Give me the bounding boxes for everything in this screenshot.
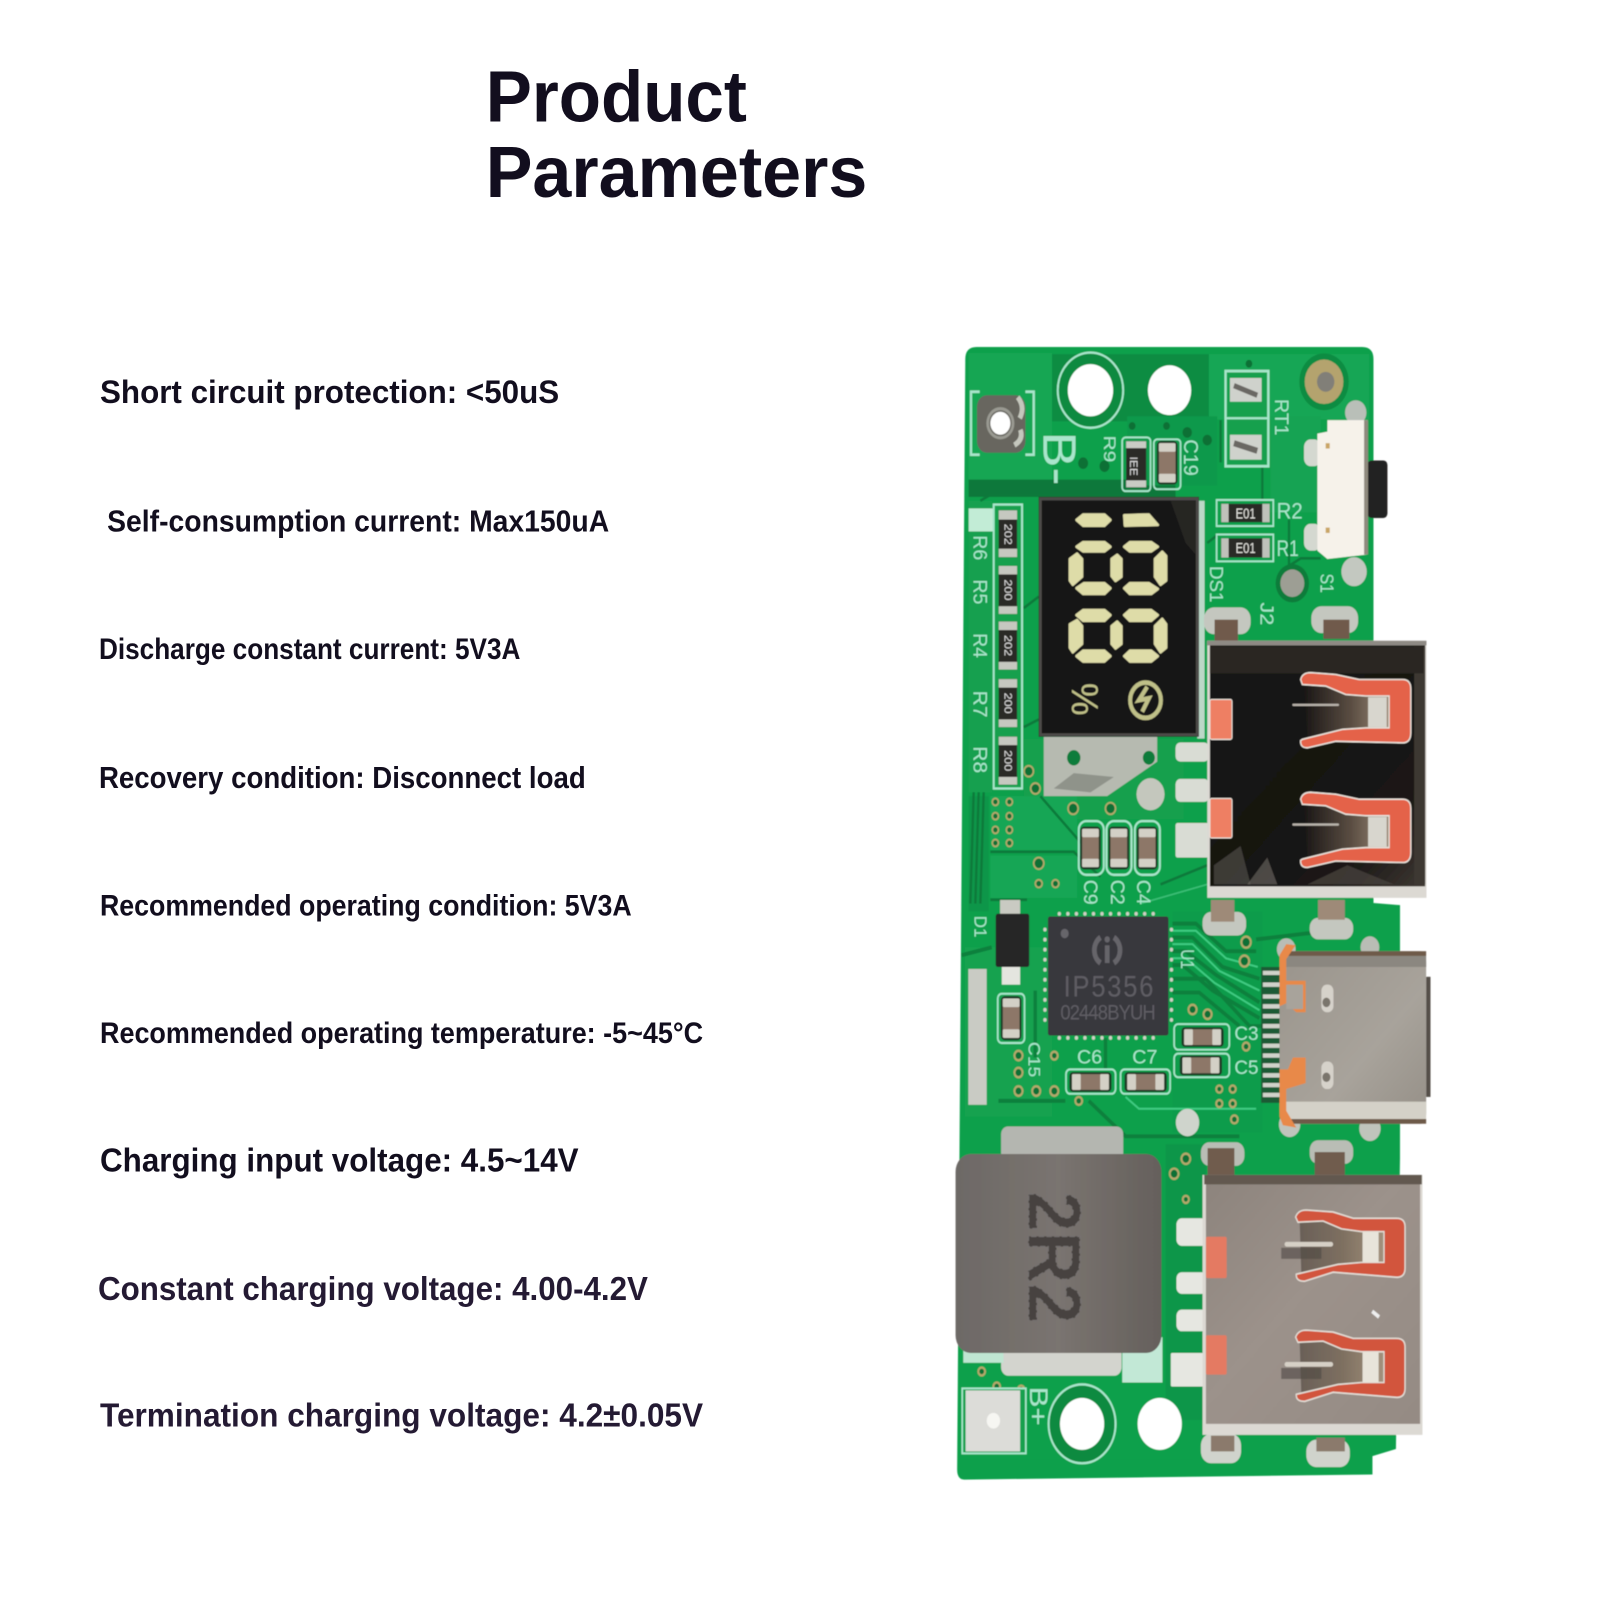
silk labels S1 DS1 J2 bbox=[1205, 566, 1336, 625]
capacitors C9 C2 C4 bbox=[1079, 821, 1160, 905]
slide switch bbox=[1304, 400, 1387, 586]
resistors R2 and R1: R2 bbox=[1277, 499, 1303, 524]
resistor R9 and capacitor C19: IEE bbox=[1127, 457, 1140, 476]
USB-A port 2 legs and pads bbox=[1171, 1140, 1353, 1467]
resistor column: R5 bbox=[969, 579, 990, 604]
mounting hole with ring, lower bbox=[1049, 1384, 1116, 1463]
title: Product bbox=[486, 56, 747, 137]
IC IP5356 chip: IP5356 bbox=[1064, 970, 1153, 1003]
USB-C connector bbox=[1261, 936, 1430, 1141]
resistor R9 and capacitor C19 bbox=[1100, 436, 1202, 491]
resistor column: R7 bbox=[969, 691, 990, 718]
label: B-: B- bbox=[1034, 432, 1086, 485]
parameter: recovery condition: Recovery condition: Disconnect load bbox=[99, 761, 586, 795]
silver strip bbox=[968, 969, 987, 1105]
LED display bbox=[1039, 497, 1205, 796]
silk labels S1 DS1 J2: DS1 bbox=[1205, 566, 1226, 602]
parameter: termination charging voltage: Termination charging voltage: 4.2±0.05V bbox=[100, 1398, 704, 1435]
vias bbox=[978, 937, 1251, 1394]
battery positive pad bbox=[962, 1386, 1053, 1453]
capacitors C9 C2 C4: C9 bbox=[1079, 880, 1100, 905]
parameter: discharge constant current: Discharge constant current: 5V3A bbox=[99, 633, 520, 666]
resistor column: 200 bbox=[1002, 693, 1015, 714]
diode D1: D1 bbox=[970, 916, 989, 937]
resistor R9 and capacitor C19: R9 bbox=[1100, 436, 1119, 462]
resistor column: R8 bbox=[969, 746, 990, 773]
resistor column: 200 bbox=[1002, 579, 1015, 601]
capacitors C6 C7 C3 C5: C7 bbox=[1132, 1045, 1157, 1068]
USB side pads bbox=[1176, 742, 1209, 858]
USB-A port 2 bbox=[1203, 1175, 1422, 1435]
parameter: recommended operating temperature: Recommended operating temperature: -5~45°C bbox=[100, 1017, 703, 1050]
IC IP5356 chip: 02448BYUH bbox=[1060, 1001, 1156, 1025]
mounting hole, lower bbox=[1138, 1398, 1182, 1450]
capacitor C15: C15 bbox=[1025, 1042, 1044, 1077]
small white pad bbox=[969, 508, 994, 531]
parameter list: Short circuit protection: <50uS bbox=[100, 373, 559, 410]
circuit board photo bbox=[956, 347, 1430, 1480]
capacitors C6 C7 C3 C5 bbox=[1066, 1022, 1258, 1094]
gold test pad bbox=[1299, 353, 1349, 410]
LED display: % bbox=[1064, 683, 1105, 716]
test via bbox=[1276, 564, 1309, 602]
silk labels S1 DS1 J2: S1 bbox=[1316, 574, 1336, 593]
test point bbox=[1176, 1109, 1199, 1136]
parameter: recommended operating condition: Recommended operating condition: 5V3A bbox=[100, 889, 632, 922]
battery positive pad: B+ bbox=[1025, 1386, 1053, 1426]
capacitors C9 C2 C4: C4 bbox=[1133, 880, 1154, 905]
parameter: constant charging voltage: Constant charging voltage: 4.00-4.2V bbox=[98, 1271, 648, 1308]
IC IP5356 chip bbox=[1045, 914, 1196, 1038]
USB-A port 1 bbox=[1207, 641, 1426, 898]
inductor 2R2: 2R2 bbox=[1012, 1191, 1095, 1323]
parameter list bbox=[98, 373, 704, 1435]
mounting hole bbox=[1148, 365, 1191, 415]
battery negative pad bbox=[971, 392, 1034, 455]
resistor R9 and capacitor C19: C19 bbox=[1179, 439, 1202, 476]
resistor column: 202 bbox=[1002, 524, 1015, 545]
title: Parameters bbox=[486, 132, 867, 213]
IC IP5356 chip: U1 bbox=[1176, 949, 1196, 969]
parameter: self-consumption current: Self-consumption current: Max150uA bbox=[107, 505, 609, 539]
capacitors C6 C7 C3 C5: C3 bbox=[1234, 1022, 1258, 1044]
vias near top bbox=[1078, 360, 1252, 472]
USB port 1 bottom legs bbox=[1203, 900, 1353, 939]
upper half of board bbox=[969, 353, 1426, 911]
vias and test pad bbox=[992, 766, 1165, 887]
resistor column: R6 bbox=[969, 535, 990, 560]
resistors R2 and R1: E01 bbox=[1236, 506, 1256, 522]
diode D1 bbox=[970, 900, 1029, 985]
silk labels S1 DS1 J2: J2 bbox=[1256, 602, 1276, 625]
resistors R2 and R1: R1 bbox=[1277, 537, 1299, 561]
resistor column: 200 bbox=[1002, 750, 1015, 771]
capacitor C15 bbox=[998, 994, 1044, 1077]
USB port top legs bbox=[1204, 606, 1358, 643]
thermistor RT1 bbox=[1226, 371, 1292, 466]
title bbox=[486, 56, 867, 213]
capacitors C6 C7 C3 C5: C5 bbox=[1234, 1056, 1258, 1078]
thermistor RT1: RT1 bbox=[1270, 399, 1292, 436]
inductor 2R2 bbox=[956, 1126, 1162, 1383]
resistor column bbox=[969, 505, 1022, 788]
resistors R2 and R1: E01 bbox=[1236, 540, 1256, 556]
capacitors C6 C7 C3 C5: C6 bbox=[1077, 1045, 1102, 1068]
resistor column: 202 bbox=[1002, 635, 1015, 656]
mounting hole with ring bbox=[1058, 353, 1123, 428]
resistors R2 and R1 bbox=[1217, 499, 1303, 561]
parameter: charging input voltage: Charging input voltage: 4.5~14V bbox=[100, 1142, 579, 1179]
resistor column: R4 bbox=[969, 633, 990, 658]
lower half of board bbox=[956, 900, 1430, 1467]
capacitors C9 C2 C4: C2 bbox=[1107, 880, 1128, 905]
